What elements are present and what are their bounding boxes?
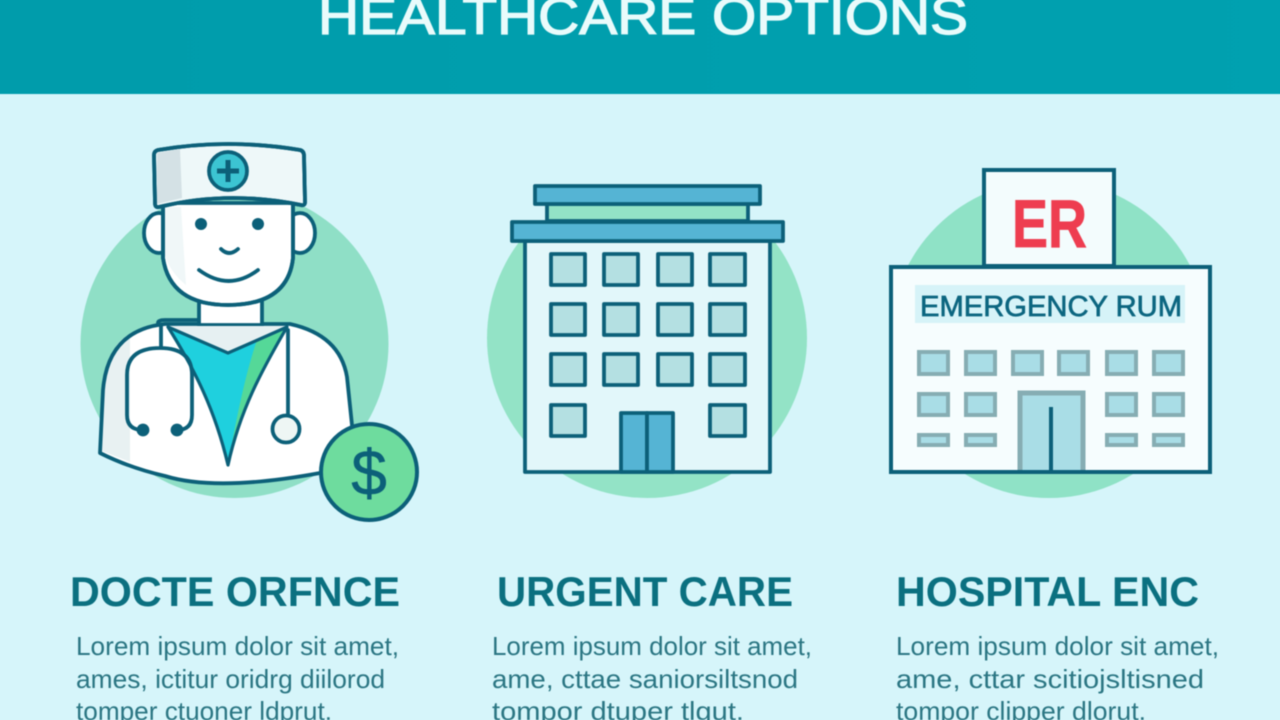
icon backdrop circle — [890, 180, 1208, 498]
heading: URGENT CARE — [497, 568, 793, 615]
header banner — [0, 0, 1280, 94]
icon: smile — [199, 270, 258, 281]
emergency room banner: EMERGENCY RUM — [920, 291, 1182, 323]
body text: ame, cttar scitiojsltisned — [896, 664, 1204, 694]
column: urgent care — [492, 568, 812, 720]
building door — [621, 413, 673, 472]
heading: HOSPITAL ENC — [896, 568, 1199, 615]
icon: cap cross badge — [209, 152, 247, 190]
body text: ames, ictitur oridrg diilorod — [76, 664, 385, 694]
body text: Lorem ipsum dolor sit amet, — [76, 631, 399, 661]
icon backdrop circle — [80, 190, 388, 498]
ER sign — [984, 170, 1114, 266]
building top roof — [535, 186, 760, 204]
icon: eyes — [195, 218, 264, 230]
icon: dollar coin — [321, 424, 417, 520]
icon: collar inner — [170, 326, 287, 353]
hospital windows — [919, 352, 1183, 445]
panel: emergency room illustration — [890, 170, 1210, 498]
icon: scarf — [168, 327, 287, 465]
column: doctor office — [70, 568, 400, 720]
body text: ame, cttae saniorsiltsnod — [492, 664, 798, 694]
icon: dollar coin: $ — [351, 437, 387, 509]
icon: doctor body — [100, 324, 352, 483]
icon: head — [163, 203, 293, 305]
hospital door — [1020, 393, 1083, 470]
icon: neck — [199, 300, 262, 325]
building upper storey — [547, 204, 748, 221]
body text — [76, 631, 399, 720]
icon backdrop circle — [486, 242, 808, 498]
icon: nose — [221, 249, 238, 253]
icon: nurse cap — [154, 144, 305, 207]
building body — [525, 241, 770, 472]
panel: doctor office illustration — [80, 144, 417, 520]
icon: ears — [144, 213, 315, 253]
body text — [492, 631, 812, 720]
heading: DOCTE ORFNCE — [70, 568, 400, 615]
column: hospital — [896, 568, 1219, 720]
hospital building — [891, 267, 1210, 472]
body text: Lorem ipsum dolor sit amet, — [492, 631, 812, 661]
body text — [896, 631, 1219, 720]
panel: urgent care illustration — [487, 178, 807, 498]
building windows — [551, 254, 745, 436]
body text: Lorem ipsum dolor sit amet, — [896, 631, 1219, 661]
building lower roof — [512, 222, 783, 241]
icon: stethoscope — [127, 325, 300, 442]
ER sign: ER — [1012, 186, 1087, 262]
